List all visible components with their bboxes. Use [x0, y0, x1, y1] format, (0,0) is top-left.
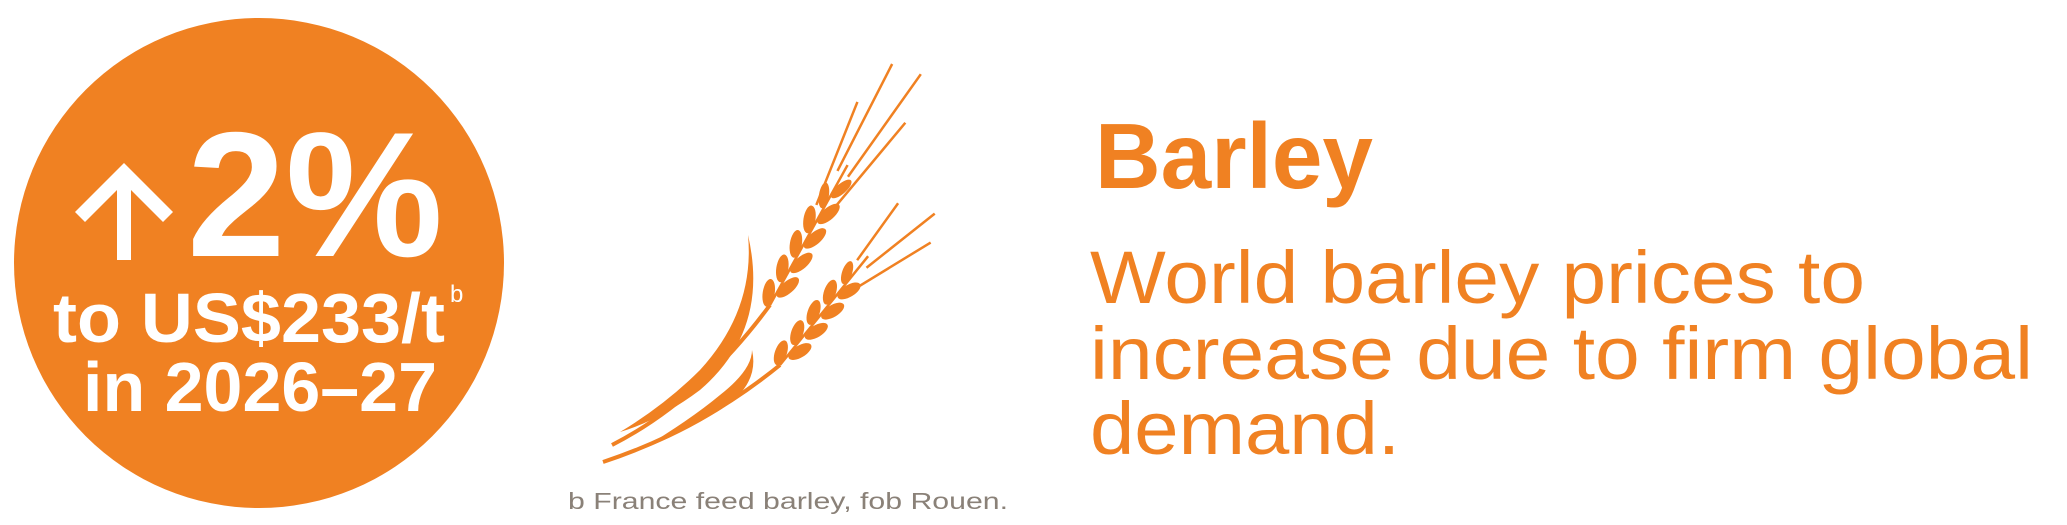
stat detail line 2: in 2026–27 — [83, 348, 437, 426]
stat detail line 1: b — [450, 281, 463, 308]
heading: Barley: Barley — [1095, 104, 1373, 208]
text block: description — [1090, 236, 2033, 470]
big stat 2%: 2% — [187, 95, 443, 294]
icon: up arrow — [75, 163, 173, 260]
stat detail line 1: to US$233/t — [53, 279, 445, 357]
icon: barley ears — [603, 54, 946, 462]
panel: orange circle stat — [14, 18, 504, 508]
text block: description: increase due to firm global — [1090, 312, 2033, 395]
text block: description: World barley prices to — [1090, 236, 1865, 319]
text block: description: demand. — [1090, 387, 1400, 470]
footnote: b France feed barley, fob Rouen. — [568, 488, 1008, 514]
